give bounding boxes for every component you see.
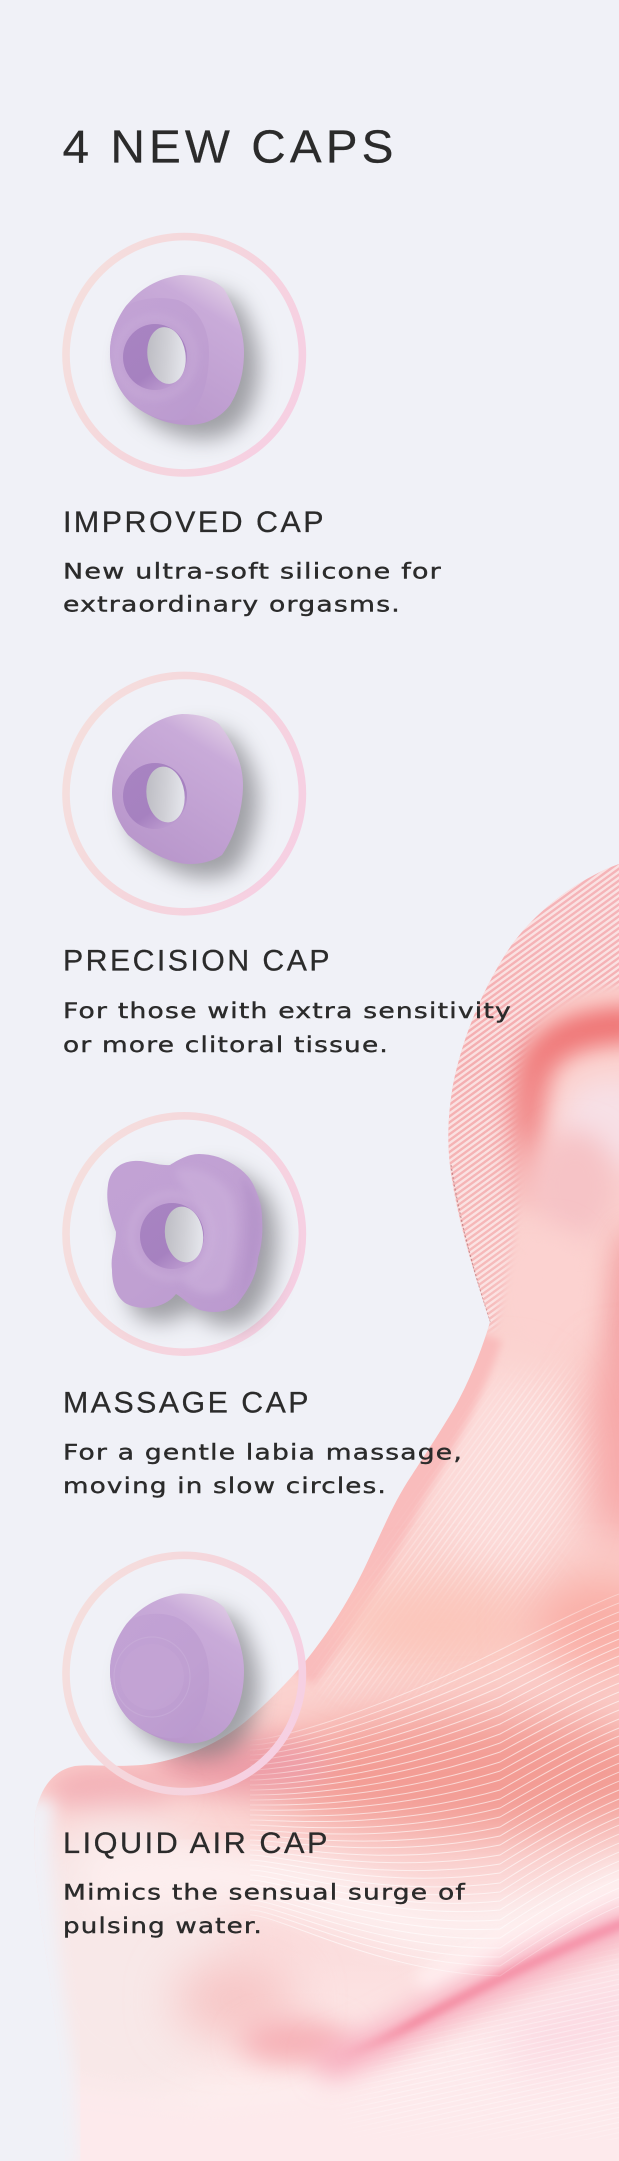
description: precision cap xyxy=(63,999,512,1058)
heading: liquid air cap: LIQUID AIR CAP xyxy=(63,1827,330,1860)
description: precision cap: or more clitoral tissue. xyxy=(63,1033,389,1058)
icon: precision cap in ring xyxy=(66,675,302,912)
heading: precision cap: PRECISION CAP xyxy=(63,945,332,978)
description: liquid air cap xyxy=(63,1881,466,1939)
description: improved cap: extraordinary orgasms. xyxy=(63,592,401,617)
wave lines xyxy=(250,1590,619,1976)
decorative pink silk ribbon xyxy=(0,850,619,2161)
description: liquid air cap: pulsing water. xyxy=(63,1914,263,1939)
description: massage cap: For a gentle labia massage, xyxy=(63,1441,463,1466)
description: massage cap xyxy=(63,1441,463,1499)
panel: improved cap xyxy=(63,237,442,617)
title: 4 NEW CAPS xyxy=(62,120,398,172)
description: improved cap: New ultra-soft silicone for xyxy=(63,560,442,585)
heading: massage cap: MASSAGE CAP xyxy=(63,1386,311,1420)
icon: improved cap in ring xyxy=(66,237,302,473)
panel: massage cap xyxy=(63,1116,463,1499)
icon: liquid air cap in ring xyxy=(66,1555,302,1792)
panel: liquid air cap xyxy=(63,1555,466,1939)
description: precision cap: For those with extra sensitivity xyxy=(63,999,512,1024)
panel: precision cap xyxy=(63,675,512,1058)
description: liquid air cap: Mimics the sensual surge of xyxy=(63,1881,466,1906)
icon: massage cap in ring xyxy=(66,1116,302,1352)
description: improved cap xyxy=(63,560,442,617)
description: massage cap: moving in slow circles. xyxy=(63,1474,387,1499)
heading: improved cap: IMPROVED CAP xyxy=(63,506,326,539)
